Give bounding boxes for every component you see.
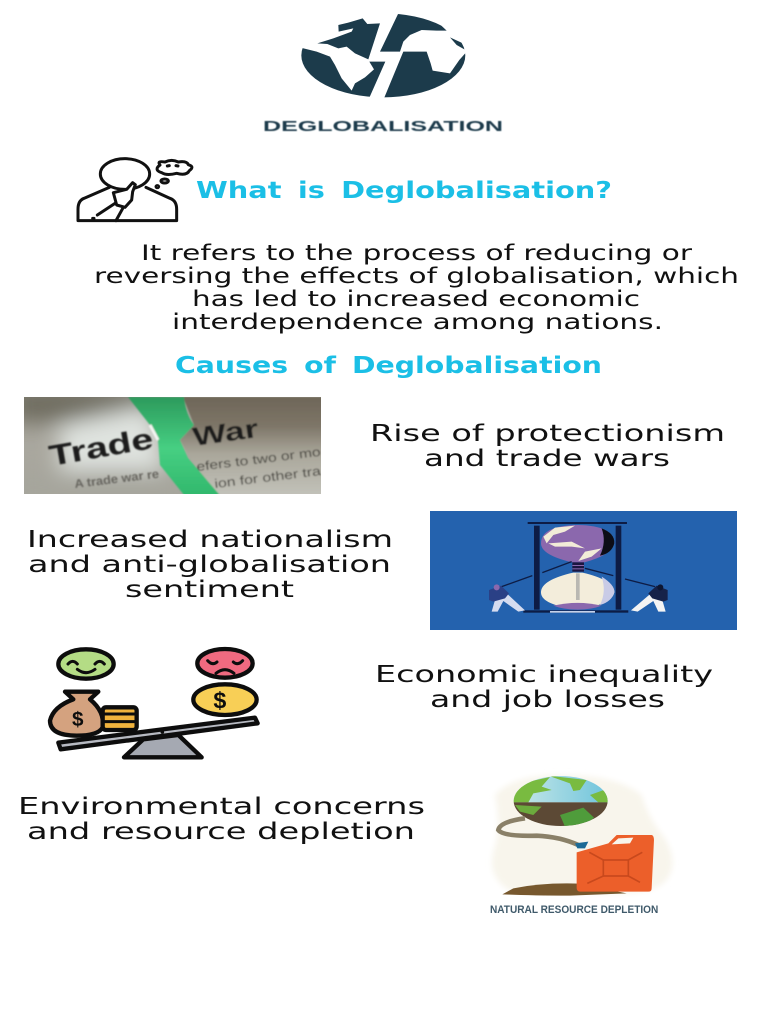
- coin stack: [103, 707, 137, 730]
- cause text: environment: and resource depletion: [27, 819, 415, 845]
- cause text: protectionism: and trade wars: [424, 446, 670, 472]
- cause text: inequality: [375, 662, 713, 713]
- cause text: protectionism: [370, 421, 725, 472]
- cause text: nationalism: Increased nationalism: [27, 527, 393, 553]
- caption: NATURAL RESOURCE DEPLETION: [490, 904, 658, 916]
- photo: trade war torn paper: A trade war re: [74, 467, 160, 491]
- photo: trade war torn paper: War: [191, 413, 260, 452]
- money bag: $: [72, 708, 84, 731]
- dollar coin: $: [213, 687, 226, 713]
- photo: trade war torn paper: Trade: [47, 423, 156, 473]
- photo: trade war torn paper: ion for other tra: [214, 464, 322, 491]
- sad face: [197, 649, 253, 678]
- beam: [58, 718, 258, 749]
- illustration: balance scale with money and faces: [50, 649, 258, 757]
- logo: split globe: [301, 14, 466, 98]
- cause text: protectionism: Rise of protectionism: [370, 421, 725, 447]
- logo wordmark: DEGLOBALISATION: [263, 118, 503, 135]
- cause text: nationalism: sentiment: [125, 577, 294, 603]
- dollar coin: [193, 684, 257, 715]
- cause text: nationalism: [27, 527, 393, 603]
- cause text: inequality: Economic inequality: [375, 662, 713, 688]
- heading: causes of deglobalisation: Causes of Deglobalisation: [175, 353, 602, 379]
- happy face: [58, 649, 114, 679]
- definition text block: interdependence among nations.: [172, 310, 663, 334]
- illustration: natural resource depletion: [490, 775, 672, 916]
- cause text: environment: [18, 794, 425, 845]
- money bag: [50, 692, 103, 736]
- cause text: inequality: and job losses: [430, 687, 665, 713]
- icon: thinking person: [78, 159, 192, 221]
- cause text: nationalism: and anti-globalisation: [28, 552, 391, 578]
- definition text block: has led to increased economic: [192, 287, 640, 311]
- definition text block: [94, 241, 739, 334]
- cause text: environment: Environmental concerns: [18, 794, 425, 820]
- definition text block: It refers to the process of reducing or: [141, 241, 693, 265]
- illustration: hourglass globe on blue: [430, 511, 737, 630]
- fulcrum: [124, 735, 202, 757]
- photo: trade war torn paper: [24, 397, 321, 494]
- photo: trade war torn paper: efers to two or mo: [196, 445, 321, 474]
- definition text block: reversing the effects of globalisation, which: [94, 264, 739, 288]
- heading: what is deglobalisation: What is Deglobalisation?: [196, 178, 612, 204]
